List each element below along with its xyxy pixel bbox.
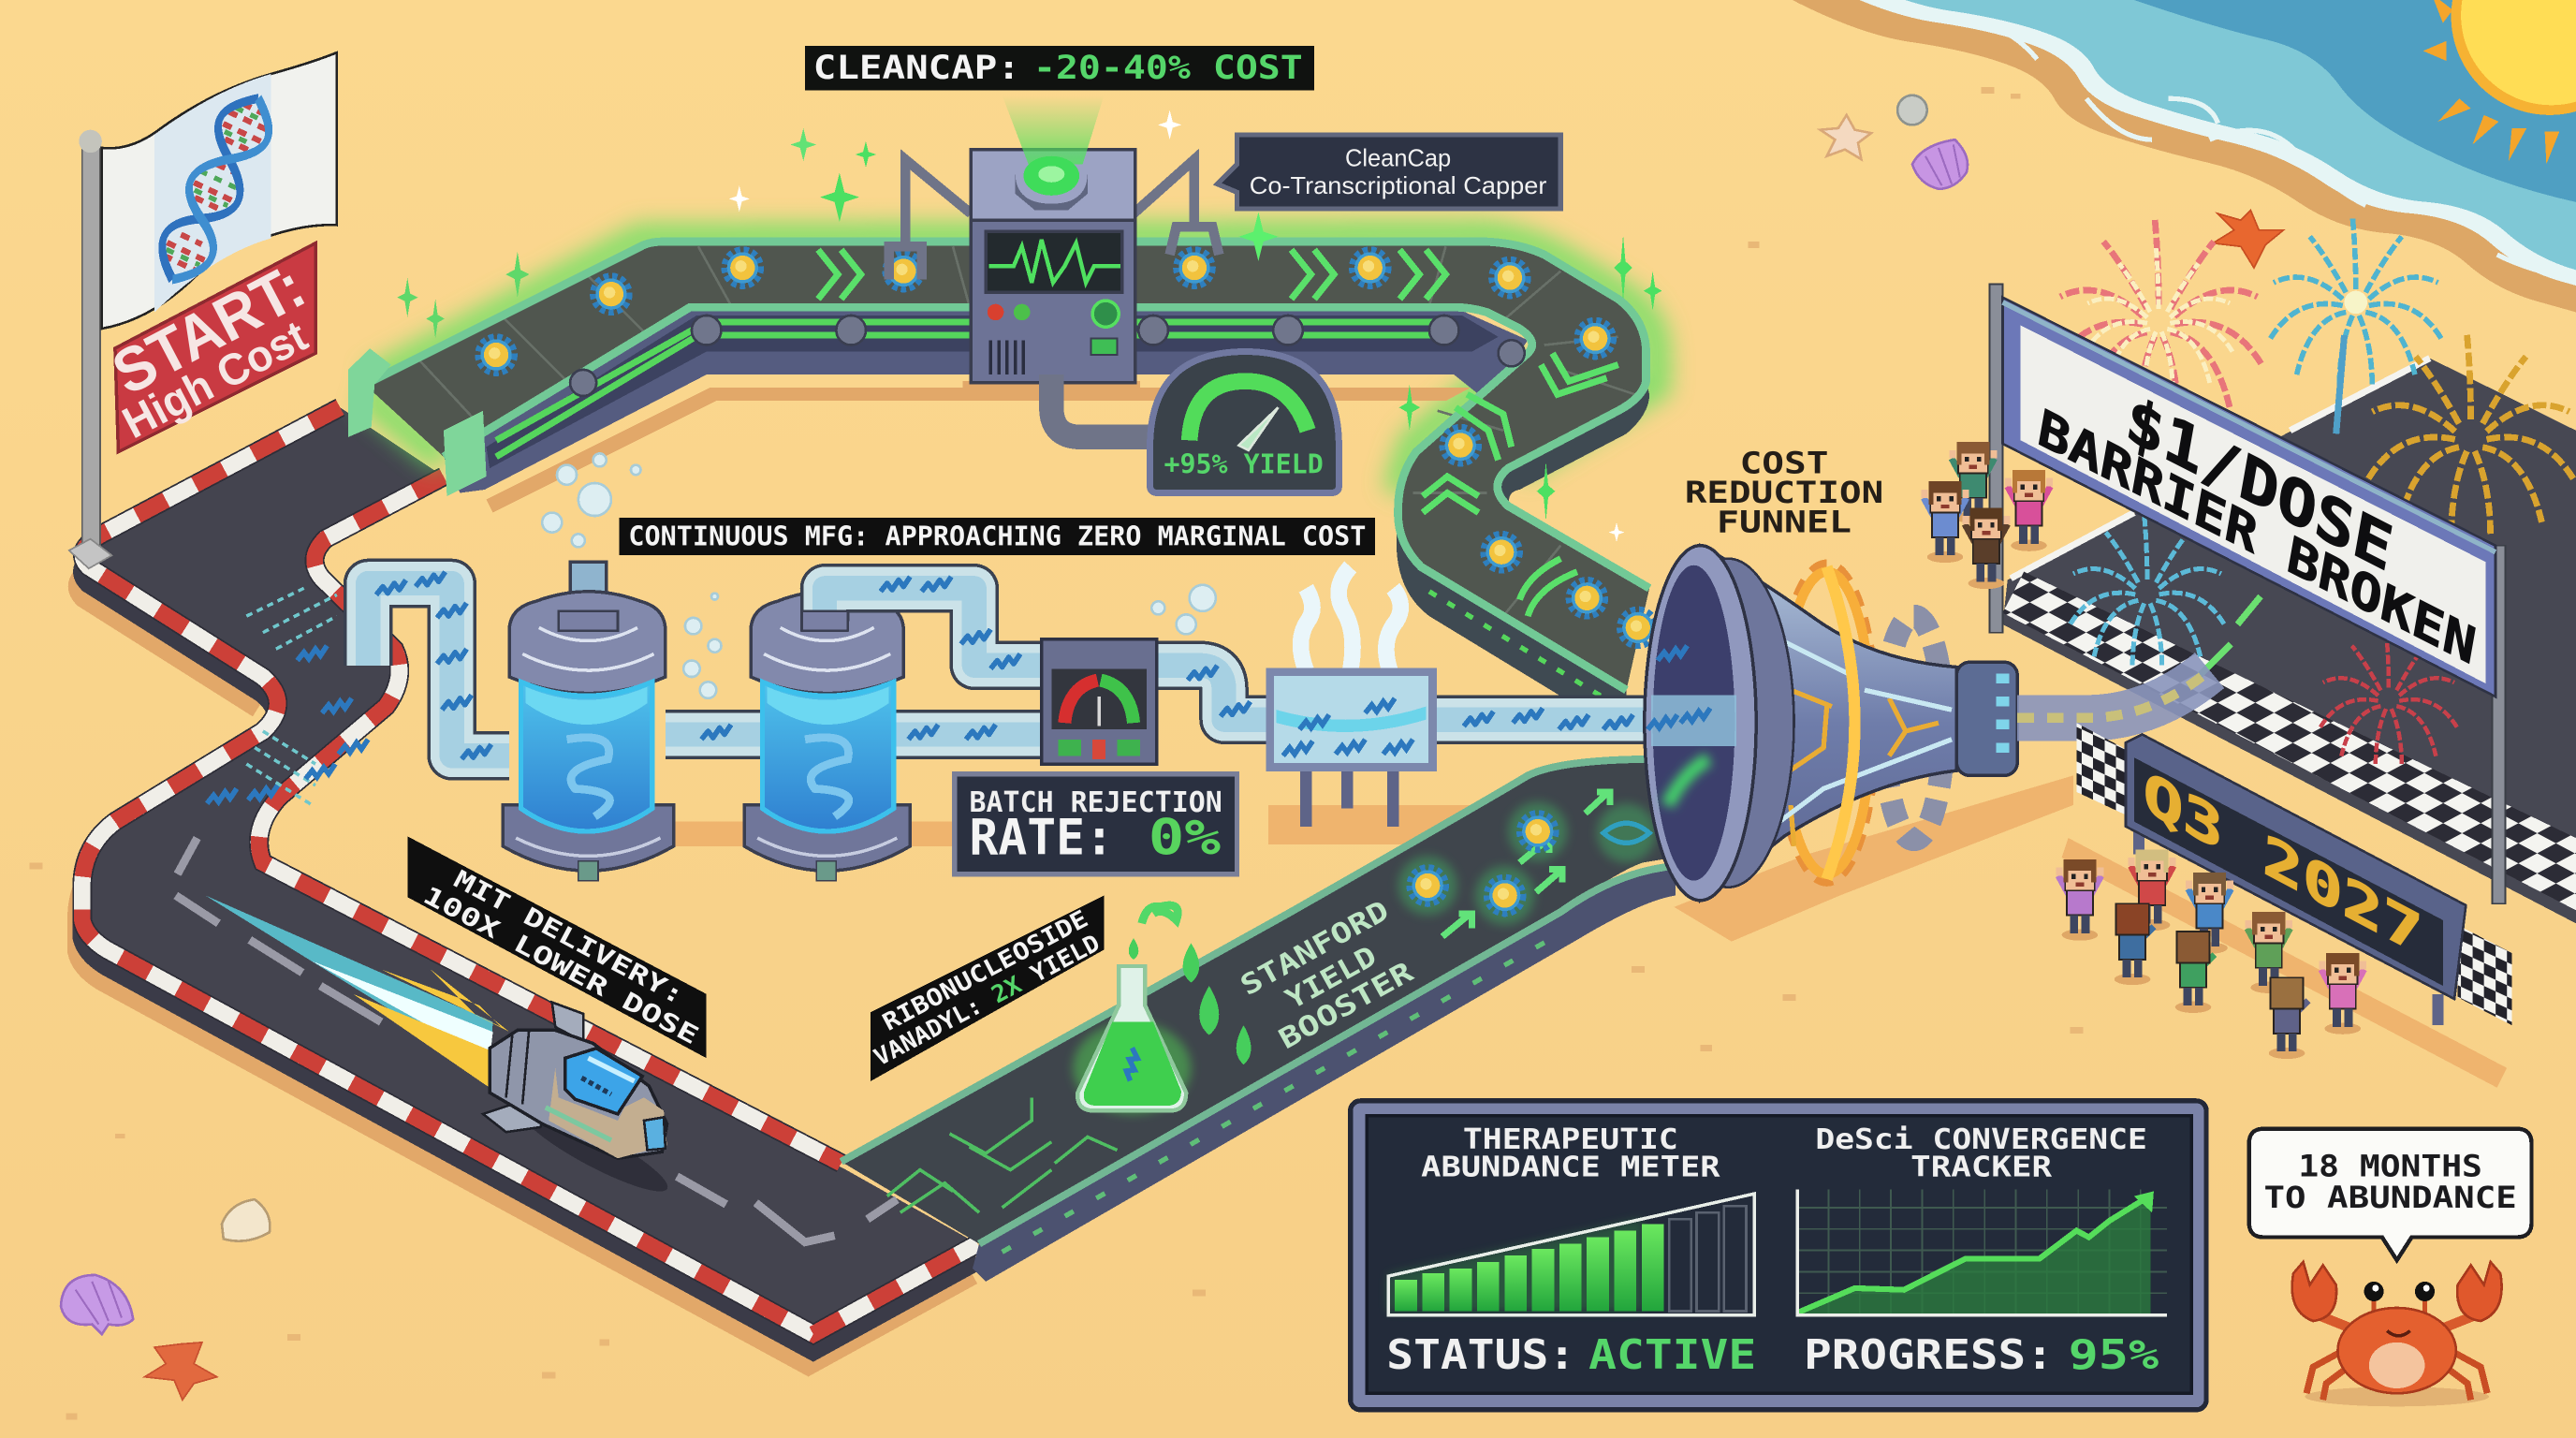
sparkles around machine <box>397 110 1661 542</box>
asphalt surface <box>82 407 977 1334</box>
side wall, S-curve lower <box>1397 509 1627 736</box>
circuit traces <box>887 1097 1117 1212</box>
MIT delivery label: MIT DELIVERY: <box>449 866 688 1011</box>
roller track <box>487 315 1499 468</box>
red arc <box>1064 681 1097 723</box>
batch rejection panel <box>955 774 1237 874</box>
belt surface <box>842 759 1692 1244</box>
engine plates <box>506 1030 529 1104</box>
gold gear ring, front <box>1827 566 1854 879</box>
funnel second band <box>1662 559 1794 888</box>
checkered strip <box>2002 572 2576 910</box>
meter glow <box>1388 1219 1643 1312</box>
icon: orange starfish <box>2213 211 2284 268</box>
firework: cyan <box>2271 217 2441 433</box>
reagent flask <box>1073 905 1251 1114</box>
banner text: BARRIER BROKEN <box>2034 398 2480 677</box>
arrows <box>1442 792 1610 936</box>
icon: purple shell <box>61 1275 133 1334</box>
meter title: THERAPEUTIC <box>1463 1123 1678 1156</box>
arrow head <box>2134 1191 2154 1212</box>
right pole <box>2492 546 2505 903</box>
panel frame <box>1351 1101 2206 1410</box>
water surface <box>1277 707 1426 732</box>
DeSci convergence tracker: TRACKER <box>1910 1152 2052 1184</box>
gold gear ring, back <box>1779 565 1875 881</box>
lower fin <box>483 1104 542 1132</box>
flag shading band <box>154 74 271 312</box>
board frame <box>2126 734 2466 999</box>
tank molecules <box>1283 698 1412 756</box>
empty bars <box>1669 1206 1746 1312</box>
output pipe <box>2017 670 2210 718</box>
right robot arm <box>1134 159 1219 255</box>
cost reduction funnel label: COST <box>1740 447 1828 480</box>
pipe collar <box>802 611 848 631</box>
base <box>503 805 674 871</box>
collar <box>1956 662 2017 775</box>
heated mixing tank <box>1270 566 1432 827</box>
CleanCap callout label: CleanCap <box>1345 145 1451 171</box>
therapeutic abundance meter: ACTIVE <box>1588 1331 1756 1379</box>
trend line <box>1797 1199 2144 1313</box>
wall green dots <box>1429 592 1618 707</box>
flask glass <box>1077 966 1186 1110</box>
pole base <box>69 539 111 568</box>
tracker title: DeSci CONVERGENCE <box>1815 1123 2147 1156</box>
legs <box>2139 814 2438 1025</box>
rollers <box>570 315 1525 396</box>
pipe outlines <box>368 583 1736 756</box>
right claw <box>2457 1262 2502 1321</box>
glass tank <box>520 682 652 831</box>
mouth molecules <box>1647 646 1710 729</box>
track side wall <box>82 424 977 1351</box>
booster label: STANFORD <box>1236 894 1395 1003</box>
outer curb <box>82 407 977 1334</box>
monitor with heartbeat <box>986 231 1122 292</box>
pipe glass <box>368 583 1736 756</box>
dashboard panel <box>1351 1101 2206 1410</box>
chevrons <box>818 250 1618 616</box>
icon: red starfish <box>145 1343 217 1400</box>
meter buttons <box>1058 740 1140 756</box>
track ground shadow <box>78 565 973 1365</box>
meter frame <box>1388 1194 1754 1315</box>
pipe molecules <box>881 577 1020 668</box>
flag cloth <box>102 52 337 329</box>
DNA swirl <box>567 738 609 816</box>
grid <box>1797 1190 2167 1314</box>
crab mascot <box>2292 1262 2502 1406</box>
CleanCap cost banner <box>805 46 1314 91</box>
arms <box>2317 1314 2478 1328</box>
green glow <box>365 235 1656 493</box>
belly <box>2369 1343 2424 1388</box>
flask glow <box>1073 1022 1191 1114</box>
top conveyor belt <box>348 235 1656 736</box>
cyan exhaust trail <box>205 895 493 1071</box>
yield gauge <box>1051 352 1339 493</box>
booster label <box>1236 894 1419 1056</box>
booster label: YIELD <box>1281 940 1383 1017</box>
firework: red on plaza <box>2320 630 2457 767</box>
firework: red and cream <box>2056 218 2261 423</box>
tan nose band <box>549 1068 667 1158</box>
finish banner <box>1989 285 2505 903</box>
icon: purple shell <box>1912 139 1968 189</box>
lane dashes <box>176 838 897 1242</box>
vent grille <box>990 340 1023 374</box>
drops <box>1129 938 1251 1064</box>
water highlight <box>768 687 889 725</box>
road molecules <box>207 646 368 803</box>
flagpole <box>82 139 100 559</box>
cost reduction funnel label: FUNNEL <box>1717 506 1852 540</box>
batch rejection panel: 0% <box>1149 810 1221 867</box>
CleanCap machine <box>397 95 1661 542</box>
DeSci convergence tracker <box>1797 1123 2167 1379</box>
ribonucleoside vanadyl label: VANADYL: 2X YIELD <box>870 929 1105 1071</box>
DNA helix <box>149 87 282 290</box>
shallow water <box>1832 0 2576 281</box>
needle <box>1238 407 1278 450</box>
left checker flag <box>2076 723 2126 814</box>
bioreactor 2 <box>744 592 910 881</box>
continuous manufacturing banner: CONTINUOUS MFG: APPROACHING ZERO MARGINAL COST <box>628 521 1366 552</box>
batch rejection panel: BATCH REJECTION <box>970 786 1222 819</box>
body <box>2337 1308 2456 1393</box>
green dome <box>1016 156 1088 211</box>
gold flames <box>353 969 509 1088</box>
steam <box>1301 566 1400 670</box>
belt edges <box>365 242 1649 690</box>
base ring <box>757 838 897 856</box>
sand specks <box>30 87 2083 1419</box>
banner cloth <box>2021 325 2485 683</box>
cockpit <box>565 1049 642 1114</box>
Q3 2027 scoreboard <box>2076 723 2511 1025</box>
CleanCap callout label <box>1218 135 1560 209</box>
eye stalks <box>2374 1298 2424 1323</box>
cap highlights <box>522 627 654 670</box>
CleanCap cost banner: CLEANCAP: <box>813 49 1020 87</box>
flask molecule <box>1118 1048 1145 1080</box>
base ring <box>516 838 661 856</box>
hull <box>490 1030 667 1158</box>
gauge housing <box>1150 352 1339 493</box>
payload particles <box>479 251 1655 645</box>
green arc <box>1101 681 1134 723</box>
cost reduction funnel <box>1645 546 2210 901</box>
spectators near banner <box>1922 442 2053 589</box>
crab speech bubble: 18 MONTHS <box>2298 1151 2482 1184</box>
cone body <box>1701 546 1956 901</box>
cost reduction funnel label: REDUCTION <box>1685 477 1883 510</box>
crab shadow <box>2305 1387 2489 1406</box>
nose window <box>644 1117 666 1151</box>
DNA emerging <box>1667 759 1708 805</box>
beach decor: top shells and starfish <box>1821 95 2284 268</box>
cost reduction funnel label <box>1685 447 1883 540</box>
icon: white shell <box>222 1199 270 1241</box>
sun <box>2423 0 2576 165</box>
nanoparticles <box>1411 814 1555 913</box>
wave crests <box>1980 23 2576 279</box>
cockpit glare <box>588 1058 634 1081</box>
axes <box>1797 1190 2167 1315</box>
legs <box>1306 764 1393 827</box>
yield text: +95% YIELD <box>1164 448 1324 479</box>
base tag <box>578 861 598 881</box>
belt surface <box>365 242 1649 690</box>
machine shadow <box>963 381 1140 401</box>
wall green dashes <box>1003 933 1560 1252</box>
crab speech bubble: TO ABUNDANCE <box>2263 1181 2517 1215</box>
DNA swirl <box>805 738 849 816</box>
icon: grey pebble <box>1897 95 1927 125</box>
meter dial <box>1051 668 1147 729</box>
belt end cap <box>348 348 487 496</box>
banner top rail <box>2002 302 2496 552</box>
firework: blue on plaza <box>2071 515 2224 668</box>
board screen <box>2134 757 2443 986</box>
meter bars <box>1395 1224 1664 1312</box>
vapour <box>1142 905 1178 923</box>
green stripe <box>546 1108 611 1140</box>
start sign: High Cost <box>115 311 315 448</box>
green rising streak <box>2188 596 2261 687</box>
DNA payloads <box>1603 759 1714 843</box>
MIT delivery rocket ship <box>205 895 675 1203</box>
cheering crowd <box>2056 849 2366 1059</box>
wet sand <box>1793 0 2576 312</box>
feed pipe <box>1051 374 1158 437</box>
date text: Q3 2027 <box>2142 758 2424 969</box>
lower housing <box>971 220 1135 383</box>
bottom Stanford yield booster conveyor <box>842 749 1720 1282</box>
left claw <box>2292 1262 2336 1321</box>
ground shadow strip under manufacturing line <box>649 805 1573 846</box>
panel screen <box>1367 1116 2191 1393</box>
CleanCap callout label: Co-Transcriptional Capper <box>1250 173 1547 199</box>
ship shadow <box>515 1097 675 1203</box>
area under line <box>1797 1196 2150 1314</box>
CleanCap cost banner: -20-40% COST <box>1033 49 1303 87</box>
progress readout: PROGRESS: <box>1804 1331 2054 1379</box>
side wall, S-curve upper <box>1498 381 1649 529</box>
green beam <box>1003 95 1104 165</box>
bubbles <box>542 453 1216 698</box>
cockpit DNA <box>581 1078 611 1094</box>
crab speech bubble <box>2249 1129 2532 1260</box>
booster label: BOOSTER <box>1274 956 1419 1056</box>
eyes <box>2364 1282 2435 1301</box>
therapeutic abundance meter: ABUNDANCE METER <box>1421 1152 1720 1184</box>
liquid <box>1084 1022 1181 1106</box>
banner text: $1/DOSE <box>2120 383 2397 587</box>
upper housing <box>971 150 1135 220</box>
race track <box>78 407 977 1365</box>
dome cap <box>751 592 903 694</box>
funnel mouth <box>1653 565 1734 881</box>
pipe core <box>368 583 1736 756</box>
nozzle <box>559 562 618 631</box>
top fin <box>552 1003 583 1042</box>
pole cap <box>79 130 102 153</box>
start flag <box>69 52 337 568</box>
glass pipes <box>368 572 1736 759</box>
side wall <box>973 866 1676 1282</box>
finish plaza <box>2002 359 2576 923</box>
pipe entering funnel <box>1651 695 1736 746</box>
DeSci convergence tracker: 95% <box>2069 1331 2159 1379</box>
foam <box>1817 0 2576 292</box>
icon: pale starfish <box>1821 115 1871 159</box>
upper glass pipe to meter <box>802 577 1051 668</box>
ground shadow under funnel <box>1674 775 2507 1088</box>
left pole <box>1989 285 2002 633</box>
start sign: START: <box>102 252 316 408</box>
deep water <box>2134 0 2576 202</box>
batch rejection panel: RATE: <box>970 810 1114 867</box>
golden cracks <box>1782 649 1939 846</box>
therapeutic abundance meter <box>1386 1123 1756 1379</box>
dome cap <box>509 592 666 694</box>
pipe molecules <box>376 572 1687 759</box>
base tag <box>816 861 836 881</box>
conveyor ground shadow <box>487 388 1471 513</box>
legs <box>2306 1347 2487 1400</box>
cap highlights <box>764 627 890 670</box>
glass tank <box>762 682 894 831</box>
green glow patches <box>1398 749 1720 925</box>
control lights <box>988 301 1119 327</box>
green arc <box>1190 381 1308 440</box>
smile <box>2387 1331 2410 1336</box>
status slot <box>1090 339 1117 355</box>
left robot arm <box>889 159 971 279</box>
status readout: STATUS: <box>1386 1331 1575 1379</box>
beach decor: bottom shells and starfish <box>61 1199 270 1400</box>
base <box>744 805 910 871</box>
teal data dashes <box>246 588 337 805</box>
belt seams <box>419 246 1634 616</box>
glass highlights <box>1758 640 1952 838</box>
plaza edge highlight <box>2011 359 2430 579</box>
firework: gold <box>2368 333 2573 538</box>
plaza surface <box>2002 359 2576 923</box>
batch quality meter <box>1042 639 1157 764</box>
side wall, straight <box>444 307 1528 493</box>
ribonucleoside vanadyl label: RIBONUCLEOSIDE <box>878 904 1092 1036</box>
water highlight <box>526 687 648 725</box>
grey gear <box>1884 616 1943 840</box>
banner frame <box>2002 298 2496 697</box>
ocean and shoreline <box>1793 0 2576 312</box>
tank frame <box>1270 672 1432 768</box>
right checker flag <box>2458 925 2511 1025</box>
white exhaust core <box>313 961 493 1060</box>
belt edges <box>842 759 1676 1244</box>
inner curb <box>259 477 842 1164</box>
MIT delivery label: 100X LOWER DOSE <box>418 882 703 1050</box>
nozzle collar front <box>559 611 618 631</box>
MIT delivery label <box>407 836 707 1058</box>
bioreactor 1 <box>503 562 674 881</box>
green rails <box>496 322 1445 457</box>
needle <box>1098 697 1100 726</box>
funnel rim <box>1645 546 1756 901</box>
